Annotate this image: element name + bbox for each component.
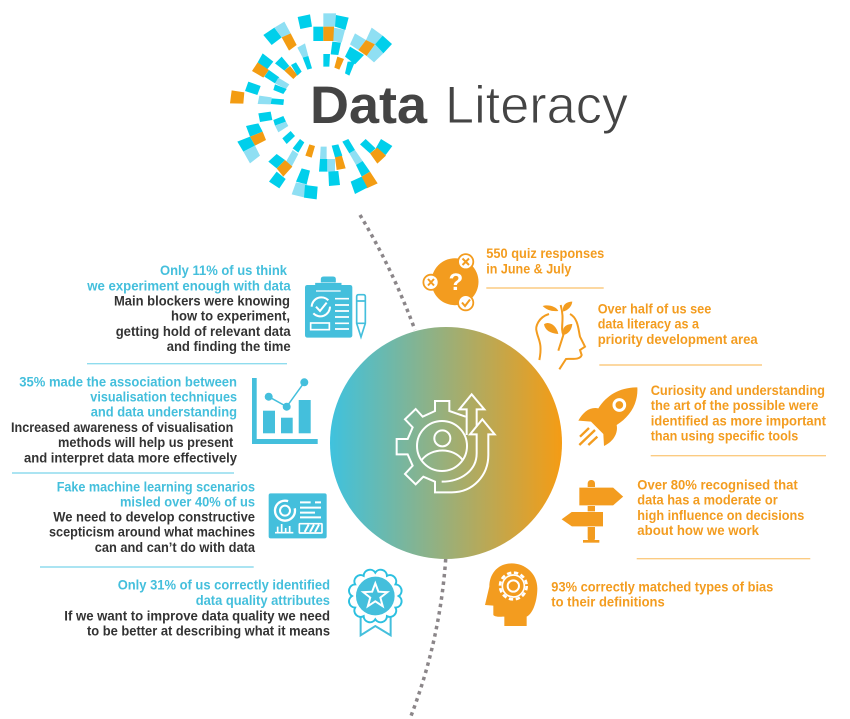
text: 550 quiz responses (486, 246, 604, 261)
text: high influence on decisions (637, 508, 804, 523)
panel: priority development (536, 301, 758, 369)
text: in June & July (486, 261, 572, 276)
heading (118, 578, 330, 608)
panel: experiment enough (86, 263, 365, 354)
body text: and interpret data more effectively (24, 450, 238, 465)
text (651, 383, 827, 443)
body text (49, 510, 256, 555)
panel: machine learning (49, 479, 327, 555)
body text: methods will help us present (58, 435, 234, 450)
logo wordmark: Data (310, 76, 428, 135)
panel: visualisation (11, 374, 318, 465)
heading: misled over 40% of us (120, 494, 255, 509)
text (551, 579, 773, 609)
text: 93% correctly matched types of bias (551, 579, 773, 594)
text: priority development area (598, 332, 758, 347)
heading: visualisation techniques (90, 390, 237, 405)
text (598, 301, 758, 347)
heading: data quality attributes (196, 593, 330, 608)
icon: clipboard and pencil (305, 277, 365, 338)
icon: bar and line chart (252, 378, 318, 444)
icon: dashboard (269, 493, 327, 538)
heading: Fake machine learning scenarios (57, 479, 255, 494)
icon: head with gear (485, 563, 537, 626)
icon: award rosette (349, 570, 402, 635)
text: the art of the possible were (651, 398, 818, 413)
panel: bias (485, 563, 773, 626)
panel: quiz responses (423, 246, 604, 310)
body text: to be better at describing what it means (87, 623, 330, 638)
heading: Only 11% of us think (160, 263, 288, 278)
heading: and data understanding (91, 405, 237, 420)
text: Over half of us see (598, 301, 711, 316)
body text: can and can’t do with data (95, 540, 256, 555)
heading: 35% made the association between (19, 374, 237, 389)
body text: getting hold of relevant data (116, 324, 291, 339)
text: about how we work (637, 523, 760, 538)
body text: If we want to improve data quality we need (64, 608, 330, 623)
icon: quiz question and answers: ? (448, 269, 463, 296)
logo wordmark: Literacy (445, 76, 628, 135)
panel: curiosity (578, 383, 827, 446)
panel: influence on decisions (561, 477, 804, 543)
text: than using specific tools (651, 428, 798, 443)
title: Data Literacy logo (230, 13, 628, 199)
heading: we experiment enough with data (86, 278, 291, 293)
body text (114, 294, 291, 354)
body text (64, 608, 330, 638)
heading: Only 31% of us correctly identified (118, 578, 330, 593)
logo mark: radial pixel burst (230, 13, 392, 199)
dotted arc above the circle (360, 215, 415, 330)
body text: Main blockers were knowing (114, 294, 290, 309)
text: Curiosity and understanding (651, 383, 825, 398)
heading (86, 263, 291, 293)
panel: data quality (64, 570, 402, 638)
icon: signpost (561, 480, 624, 543)
text: data has a moderate or (637, 493, 778, 508)
text (486, 246, 604, 276)
body text: how to experiment, (171, 309, 290, 324)
central gradient circle with gear icon (330, 327, 562, 559)
body text: Increased awareness of visualisation (11, 420, 233, 435)
dotted arc below the circle (411, 559, 446, 716)
text (637, 477, 804, 538)
body text: scepticism around what machines (49, 525, 255, 540)
text: Over 80% recognised that (637, 477, 798, 492)
body text: We need to develop constructive (53, 510, 255, 525)
icon: head with growing plant (536, 302, 585, 369)
icon: quiz question and answers (423, 254, 478, 310)
icon: rocket (578, 387, 637, 446)
heading (19, 374, 237, 420)
body text: and finding the time (167, 339, 291, 354)
text: identified as more important (651, 413, 827, 428)
body text (11, 420, 238, 465)
text: to their definitions (551, 594, 665, 609)
text: data literacy as a (598, 317, 700, 332)
heading (57, 479, 255, 509)
icon: gear, person and growth arrows (397, 394, 495, 492)
